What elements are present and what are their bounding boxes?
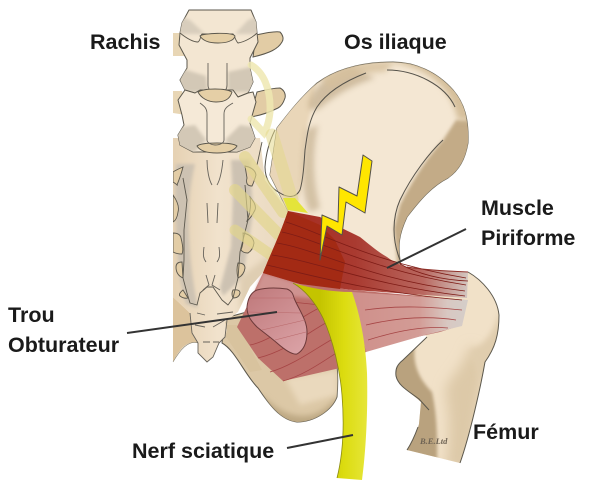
spine: sacrum and coccyx [173,138,288,362]
bone: ilium [264,62,469,266]
label: Nerf sciatique: Nerf sciatique [132,439,274,463]
credit text: B.E.Ltd [419,436,448,446]
label: Muscle Piriforme: Muscle [481,196,554,220]
foramina lobes [173,166,256,298]
label: Rachis: Rachis [90,30,161,54]
label: Muscle Piriforme: Piriforme [481,226,575,250]
label: Fémur: Fémur [473,420,539,444]
label: Os iliaque: Os iliaque [344,30,447,54]
vertebra 2 [176,89,258,153]
lightning bolt icon [320,155,372,260]
leader line: Trou Obturateur [127,312,277,333]
sacrum grey bands [175,164,198,308]
label: Trou Obturateur [8,303,120,357]
label: Trou Obturateur: Trou [8,303,55,327]
spine: transverse processes [173,32,285,117]
bone: femur [395,272,500,464]
label: Trou Obturateur: Obturateur [8,333,120,357]
muscle: lower obturator [237,273,468,381]
muscle: piriforme [263,211,468,300]
sacrum contour lines [183,178,248,305]
left hip wedge [173,297,198,362]
bone: ischium and pubic band [222,312,338,422]
leader line: Nerf sciatique [287,435,353,448]
ilium inner contours [265,70,455,260]
label: Muscle Piriforme [481,196,575,250]
sciatic nerve [283,198,367,480]
leader line: Muscle Piriforme [387,229,466,268]
nerve roots: translucent ribbons [235,65,292,255]
vertebra 1 [178,10,260,97]
obturator foramen [247,288,307,354]
